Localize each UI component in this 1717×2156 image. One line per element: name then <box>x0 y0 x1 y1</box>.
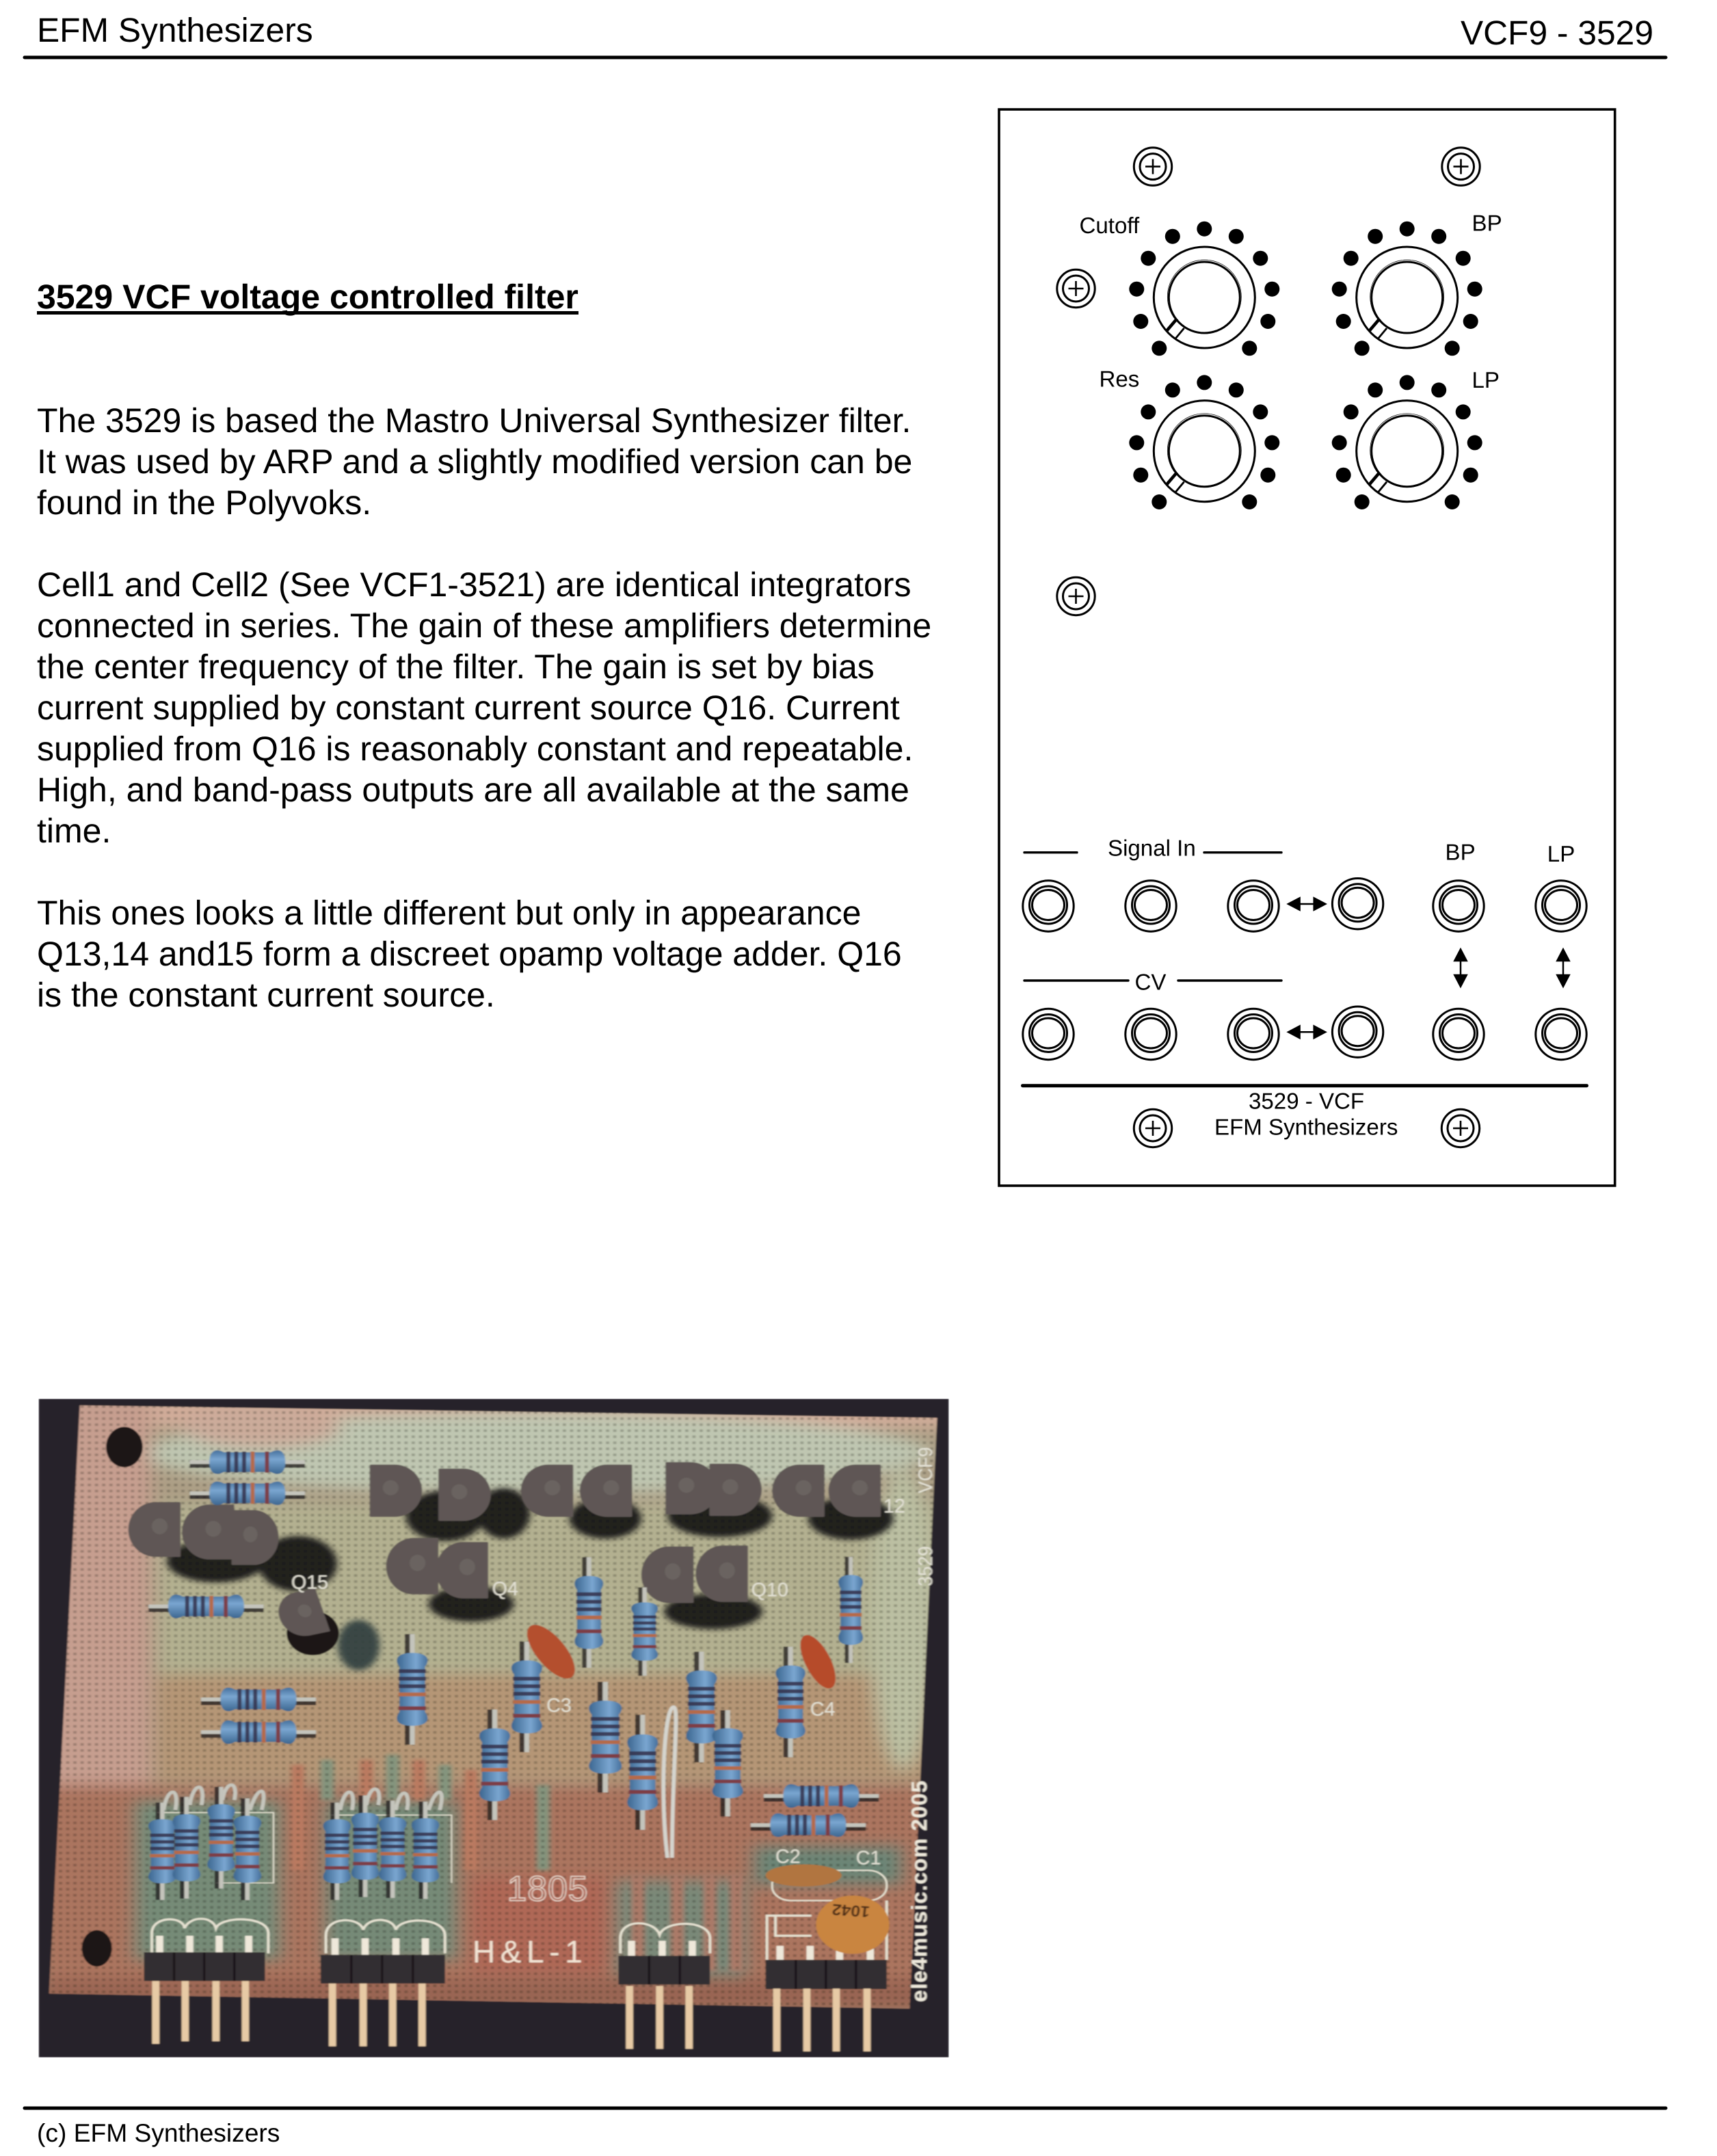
text block: opamp paragraph: Q13,14 and15 form a discreet opamp voltage adder. Q16 <box>37 935 902 973</box>
text block: opamp paragraph <box>37 894 902 1014</box>
photo background <box>38 1399 949 2058</box>
footer rule <box>25 2106 1666 2110</box>
silkscreen board labels: Q4 <box>492 1578 518 1600</box>
signal in label and rule: Signal In <box>1108 836 1196 862</box>
signal in label and rule: CV <box>1135 970 1166 995</box>
jacks: lower row <box>1023 1007 1586 1060</box>
signal in label and rule: BP <box>1446 840 1476 866</box>
text block: opamp paragraph: This ones looks a little different but only in appearance <box>37 894 861 932</box>
text block: intro paragraph: It was used by ARP and a slightly modified version can be <box>37 442 912 481</box>
silkscreen board labels: Q10 <box>751 1580 788 1601</box>
jacks: upper row <box>1023 878 1586 931</box>
manufacturer credit, rotated: ele4music.com 2005 <box>907 1780 931 2002</box>
panel caption <box>1214 1089 1398 1140</box>
text block: cell description paragraph: current supplied by constant current source Q16. Current <box>37 689 900 727</box>
silkscreen board labels: C4 <box>810 1699 835 1720</box>
knob: Cutoff <box>1129 222 1279 356</box>
text block: cell description paragraph: Cell1 and Cell2 (See VCF1-3521) are identical integrators <box>37 565 911 604</box>
silkscreen board labels: VCF9 <box>915 1447 936 1493</box>
photo: assembled circuit board <box>38 1398 955 2058</box>
panel: VCF front panel drawing <box>999 109 1615 1186</box>
text block: intro paragraph: The 3529 is based the Mastro Universal Synthesizer filter. <box>37 401 911 440</box>
knob: LP <box>1332 375 1482 509</box>
knob: BP <box>1332 222 1482 356</box>
panel rule <box>1023 1084 1586 1087</box>
panel caption: EFM Synthesizers <box>1214 1115 1398 1140</box>
footer copyright: (c) EFM Synthesizers <box>37 2118 280 2147</box>
capacitors <box>518 1619 890 1954</box>
silkscreen board labels: C1 <box>856 1848 881 1869</box>
panel outline <box>999 109 1615 1186</box>
knob labels: LP <box>1472 368 1500 393</box>
board id H&amp;L-1: H&L-1 <box>472 1935 587 1969</box>
text block: cell description paragraph: High, and band-pass outputs are all available at the same <box>37 771 909 809</box>
text block: cell description paragraph <box>37 565 931 850</box>
panel caption: 3529 - VCF <box>1249 1089 1364 1115</box>
header: page code: VCF9 - 3529 <box>1461 14 1653 52</box>
header: company name: EFM Synthesizers <box>37 11 313 49</box>
mounting holes <box>82 1427 143 1967</box>
knob labels: Res <box>1100 367 1139 392</box>
resistors: vertical <box>397 1557 863 1830</box>
text block: intro paragraph: found in the Polyvoks. <box>37 483 371 522</box>
wire link <box>663 1707 676 1858</box>
board copper and solder mask <box>39 1398 955 2017</box>
text block: cell description paragraph: connected in series. The gain of these amplifiers determine <box>37 607 931 645</box>
silkscreen board labels: C3 <box>546 1695 572 1716</box>
knob labels <box>1079 211 1502 393</box>
text block: intro paragraph <box>37 401 912 522</box>
knob: Res <box>1129 375 1279 509</box>
copper trace stripes <box>297 1755 736 1971</box>
solder pads with pin stubs <box>160 1936 870 1960</box>
capacitor marking: 1042 <box>831 1900 870 1921</box>
section heading with underline: 3529 VCF voltage controlled filter <box>37 278 578 316</box>
silkscreen board labels: Q15 <box>291 1572 328 1593</box>
board id 1805: 1805 <box>507 1869 588 1908</box>
knob labels: BP <box>1472 211 1502 236</box>
silkscreen outlines <box>152 1813 887 1960</box>
pin headers <box>144 1952 887 1989</box>
silkscreen board labels: 3529 <box>915 1546 936 1586</box>
resistor array: left <box>148 1785 264 1900</box>
signal in label and rule: LP <box>1547 842 1575 867</box>
silkscreen board labels: C2 <box>775 1846 801 1867</box>
silkscreen board labels: 12 <box>883 1495 905 1517</box>
resistor array: right <box>323 1789 442 1900</box>
text block: cell description paragraph: the center frequency of the filter. The gain is set by bias <box>37 648 875 686</box>
text block: cell description paragraph: supplied from Q16 is reasonably constant and repeatable. <box>37 730 913 768</box>
knob labels: Cutoff <box>1079 213 1140 239</box>
shadows of components <box>167 1488 893 1671</box>
arrows: jack connections <box>1288 898 1569 1038</box>
header rule <box>25 56 1666 59</box>
signal in label and rule <box>1024 836 1575 995</box>
silkscreen board labels <box>291 1447 936 1869</box>
transistors <box>129 1463 879 1655</box>
mounting screws <box>1057 148 1480 1147</box>
header pins <box>156 1981 867 2051</box>
text block: cell description paragraph: time. <box>37 812 111 850</box>
resistors: horizontal <box>148 1450 879 1837</box>
text block: opamp paragraph: is the constant current source. <box>37 976 495 1014</box>
